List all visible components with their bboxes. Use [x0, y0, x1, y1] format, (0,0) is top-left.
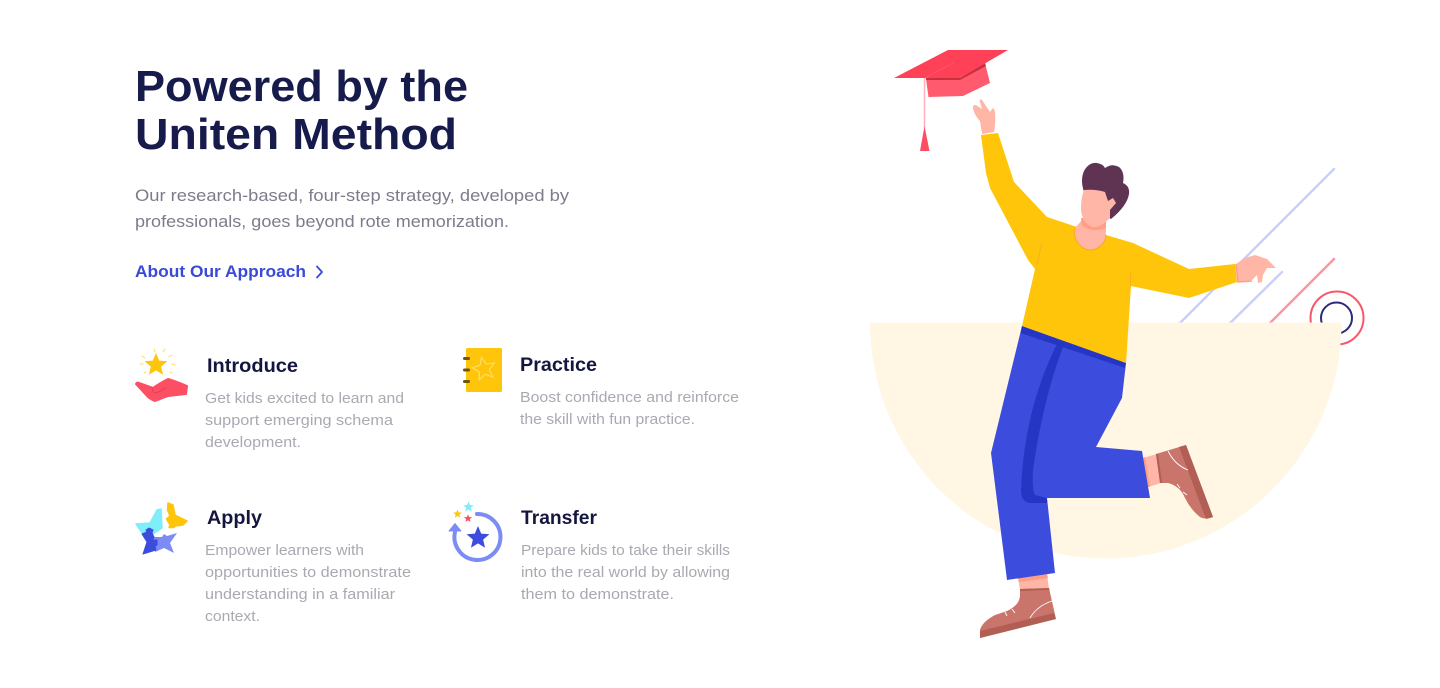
right hand	[1236, 255, 1276, 283]
collar and neck	[1074, 220, 1106, 250]
text: transfer: Prepare kids to take their skills	[521, 542, 730, 559]
trousers	[991, 326, 1150, 580]
title: Uniten Method	[135, 110, 457, 159]
text: apply: understanding in a familiar	[205, 586, 395, 603]
heading: introduce: Introduce	[207, 356, 298, 377]
raised hand	[973, 99, 995, 134]
heading: transfer: Transfer	[521, 508, 598, 529]
diagonal lines and circles	[1170, 169, 1364, 344]
heading: practice: Practice	[520, 355, 597, 376]
panel: apply	[136, 503, 411, 625]
illustration: graduate	[870, 50, 1364, 638]
face	[1081, 190, 1116, 227]
link: about our approach: About Our Approach	[135, 262, 306, 281]
title	[135, 62, 468, 159]
head	[1081, 163, 1129, 230]
sweater fold lines	[1037, 242, 1131, 288]
text: transfer: into the real world by allowing	[521, 564, 730, 581]
text: introduce	[205, 390, 404, 451]
text: transfer	[521, 542, 730, 603]
intro paragraph	[135, 186, 570, 231]
icon: notebook	[463, 348, 502, 392]
intro paragraph: professionals, goes beyond rote memorization.	[135, 212, 509, 231]
text: transfer: them to demonstrate.	[521, 586, 674, 603]
text: apply: context.	[205, 608, 260, 625]
left shoe and sock	[980, 574, 1056, 638]
text: apply: Empower learners with	[205, 542, 364, 559]
text: practice: the skill with fun practice.	[520, 411, 695, 428]
panel: practice	[463, 348, 739, 428]
text: apply	[205, 542, 411, 625]
icon: puzzle star	[136, 503, 187, 554]
text: introduce: support emerging schema	[205, 412, 394, 429]
graduation cap	[894, 50, 1008, 151]
title: Powered by the	[135, 62, 468, 111]
heading: apply: Apply	[207, 508, 262, 529]
sweater	[981, 133, 1237, 363]
chin shadow	[1081, 218, 1106, 230]
panel: introduce	[136, 349, 404, 451]
right shoe and sock	[1143, 445, 1213, 519]
text: introduce: Get kids excited to learn and	[205, 390, 404, 407]
icon: circular arrow with stars	[449, 502, 500, 560]
icon: star on hand	[136, 349, 187, 401]
intro paragraph: Our research-based, four-step strategy, developed by	[135, 186, 570, 205]
text: introduce: development.	[205, 434, 301, 451]
text: practice	[520, 389, 739, 428]
text: practice: Boost confidence and reinforce	[520, 389, 739, 406]
text: apply: opportunities to demonstrate	[205, 564, 411, 581]
semicircle background	[870, 322, 1342, 558]
panel: transfer	[449, 502, 730, 603]
hair	[1082, 163, 1129, 219]
